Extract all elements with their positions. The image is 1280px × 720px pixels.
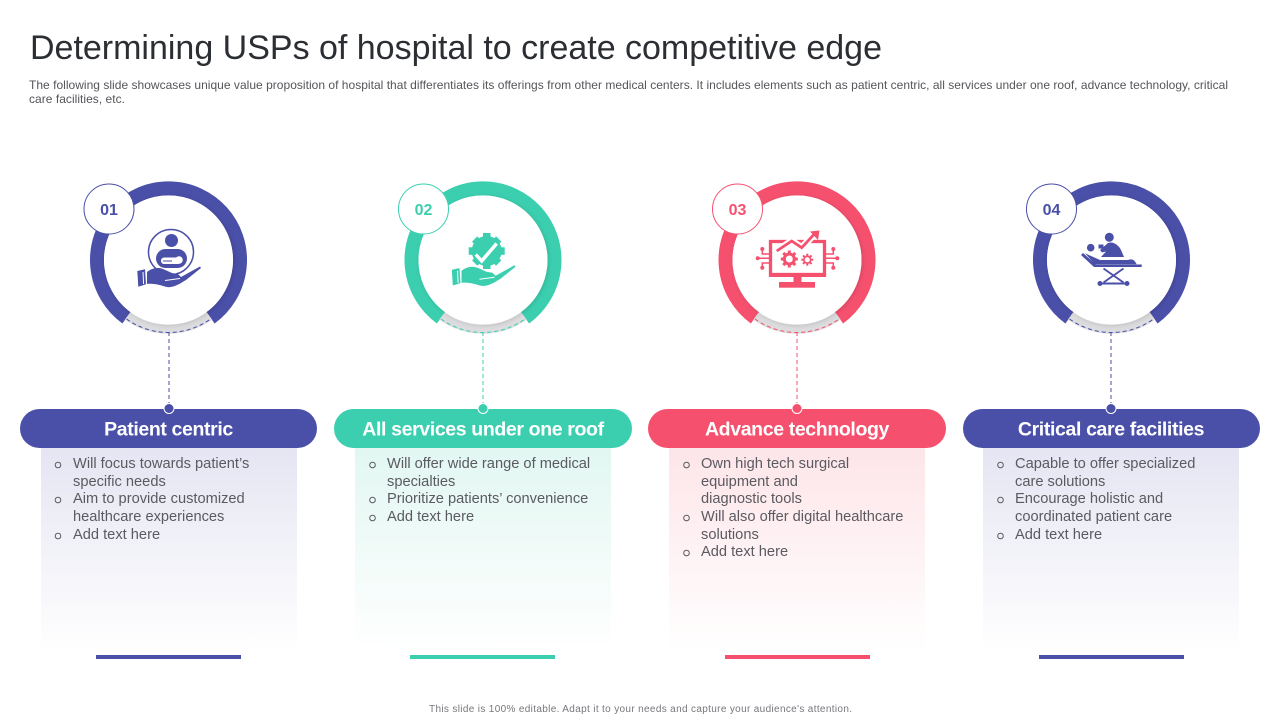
accent bar <box>725 655 870 659</box>
header pill <box>963 409 1260 448</box>
connector dot <box>478 404 488 414</box>
bullet list: Capable to offer specialized <box>1015 456 1195 472</box>
content background <box>355 448 611 652</box>
icon: monitor with gears and rising arrow <box>756 230 839 288</box>
bullet list: coordinated patient care <box>1015 509 1172 525</box>
bullet list: care solutions <box>1015 474 1105 490</box>
connector <box>168 332 170 405</box>
bullet list: healthcare experiences <box>73 509 224 525</box>
ring <box>412 188 554 333</box>
bullet list: Add text here <box>73 527 160 543</box>
icon: hand holding gear with check <box>452 233 516 286</box>
bullet list <box>55 456 249 543</box>
description text: care facilities, etc. <box>29 92 125 106</box>
header pill: Advance technology <box>705 418 890 440</box>
connector <box>1110 332 1112 405</box>
bullet list: specific needs <box>73 474 166 490</box>
bullet list: diagnostic tools <box>701 491 802 507</box>
ring <box>1040 188 1183 333</box>
connector <box>482 332 484 405</box>
accent bar <box>96 655 241 659</box>
header pill: Critical care facilities <box>1018 418 1205 440</box>
panel: advance technology <box>648 184 946 659</box>
bullet list: Add text here <box>387 509 474 525</box>
bullet list: Own high tech surgical <box>701 456 849 472</box>
content background <box>41 448 297 652</box>
bullet list: Will offer wide range of medical <box>387 456 590 472</box>
accent bar <box>1039 655 1184 659</box>
accent bar <box>410 655 555 659</box>
panel: patient centric <box>20 184 317 659</box>
panel: critical care facilities <box>963 184 1260 659</box>
panel: all services under one roof <box>334 184 632 659</box>
icon: patient on stretcher with caregiver <box>1081 233 1142 286</box>
title: Determining USPs of hospital to create competitive edge <box>30 29 882 67</box>
bullet list: Aim to provide customized <box>73 491 245 507</box>
bullet list: equipment and <box>701 474 798 490</box>
header pill <box>334 409 632 448</box>
bullet list <box>684 456 903 560</box>
connector dot <box>792 404 802 414</box>
bullet list: Prioritize patients’ convenience <box>387 491 588 507</box>
number badge: 04 <box>1043 202 1060 219</box>
ring <box>726 188 868 333</box>
bullet list: Add text here <box>1015 527 1102 543</box>
description text: The following slide showcases unique value proposition of hospital that differentiates its offerings from other medical centers. It includes elements such as patient centric, all services under one roof, advance technology, critical <box>29 78 1228 92</box>
bullet list: solutions <box>701 527 759 543</box>
number badge <box>84 184 134 234</box>
number badge: 01 <box>100 202 118 219</box>
ring <box>97 188 240 333</box>
connector <box>796 332 798 405</box>
footer note: This slide is 100% editable. Adapt it to your needs and capture your audience's attention. <box>429 704 852 715</box>
connector dot <box>164 404 174 414</box>
bullet list <box>370 456 590 525</box>
description text <box>29 78 1228 106</box>
icon: hand holding mother and baby <box>137 230 201 287</box>
bullet list: Will focus towards patient’s <box>73 456 249 472</box>
header pill: All services under one roof <box>362 418 605 440</box>
content background <box>669 448 925 652</box>
header pill: Patient centric <box>104 418 233 440</box>
bullet list: Add text here <box>701 544 788 560</box>
number badge: 02 <box>415 202 432 219</box>
header pill <box>648 409 946 448</box>
bullet list: Encourage holistic and <box>1015 491 1163 507</box>
bullet list: Will also offer digital healthcare <box>701 509 903 525</box>
bullet list: specialties <box>387 474 455 490</box>
header pill <box>20 409 317 448</box>
number badge: 03 <box>729 202 746 219</box>
bullet list <box>998 456 1195 543</box>
connector dot <box>1106 404 1116 414</box>
content background <box>983 448 1239 652</box>
number badge <box>1026 184 1076 234</box>
number badge <box>712 184 762 234</box>
number badge <box>398 184 448 234</box>
